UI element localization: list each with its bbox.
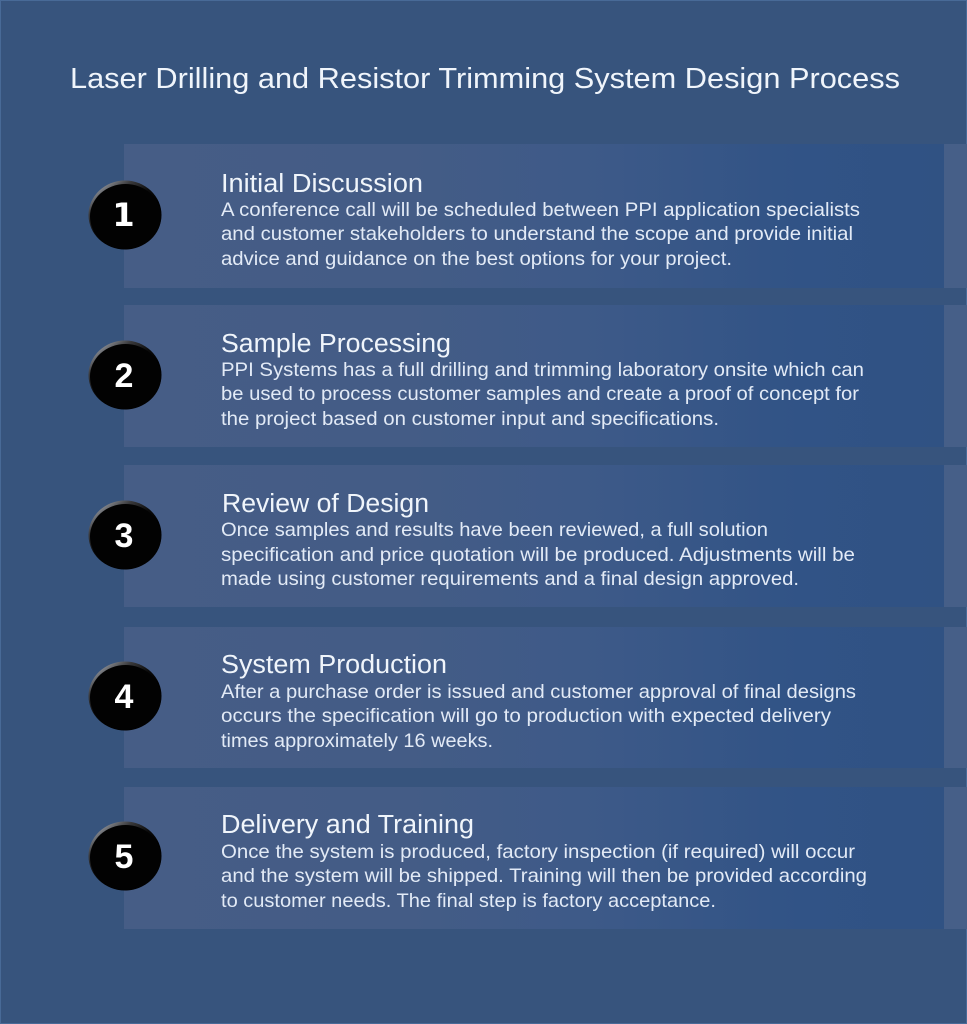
body text 2: be used to process customer samples and create a proof of concept for [221,384,860,405]
step 3 panel [88,465,967,607]
body text 4 [221,682,856,752]
badge 2: 2 [115,357,133,395]
body text 5: Once the system is produced, factory inspection (if required) will occur [221,842,856,863]
badge 2 [88,340,162,410]
panel background 1 [124,144,967,288]
panel background 2 [124,305,967,447]
body text 3: specification and price quotation will be produced. Adjustments will be [221,545,855,566]
heading: Review of Design: Review of Design [222,490,429,518]
step 4 panel [88,627,967,768]
step 1 panel [88,144,967,288]
body text 4: After a purchase order is issued and customer approval of final designs [221,682,856,703]
body text 5 [221,842,867,912]
badge 1 [88,180,162,250]
badge 1: 1 [112,196,135,234]
badge 3 [88,500,162,570]
badge 4 [88,662,162,730]
body text 2 [221,360,864,430]
panel background 5 [124,787,967,929]
heading: Delivery and Training: Delivery and Training [221,811,474,839]
badge 5: 5 [115,838,133,876]
body text 5: to customer needs. The final step is factory acceptance. [221,891,716,912]
body text 3 [221,520,855,590]
body text 4: times approximately 16 weeks. [221,731,493,752]
panel background 4 [124,627,967,768]
panel background 3 [124,465,967,607]
heading: Sample Processing: Sample Processing [221,330,451,358]
heading: Initial Discussion: Initial Discussion [221,170,423,198]
body text 1 [221,200,860,270]
body text 1: A conference call will be scheduled between PPI application specialists [221,200,860,221]
body text 5: and the system will be shipped. Training will then be provided according [221,866,867,887]
body text 3: Once samples and results have been reviewed, a full solution [221,520,768,541]
heading: System Production: System Production [221,651,447,679]
body text 1: advice and guidance on the best options for your project. [221,249,732,270]
badge 3: 3 [115,517,133,555]
body text 3: made using customer requirements and a final design approved. [221,569,799,590]
body text 2: PPI Systems has a full drilling and trimming laboratory onsite which can [221,360,864,381]
body text 1: and customer stakeholders to understand the scope and provide initial [221,224,853,245]
badge 5 [88,822,162,890]
title: Laser Drilling and Resistor Trimming System Design Process [70,63,900,95]
body text 2: the project based on customer input and specifications. [221,409,719,430]
body text 4: occurs the specification will go to production with expected delivery [221,706,831,727]
badge 4: 4 [115,678,134,716]
step 2 panel [88,305,967,447]
step 5 panel [88,787,967,929]
